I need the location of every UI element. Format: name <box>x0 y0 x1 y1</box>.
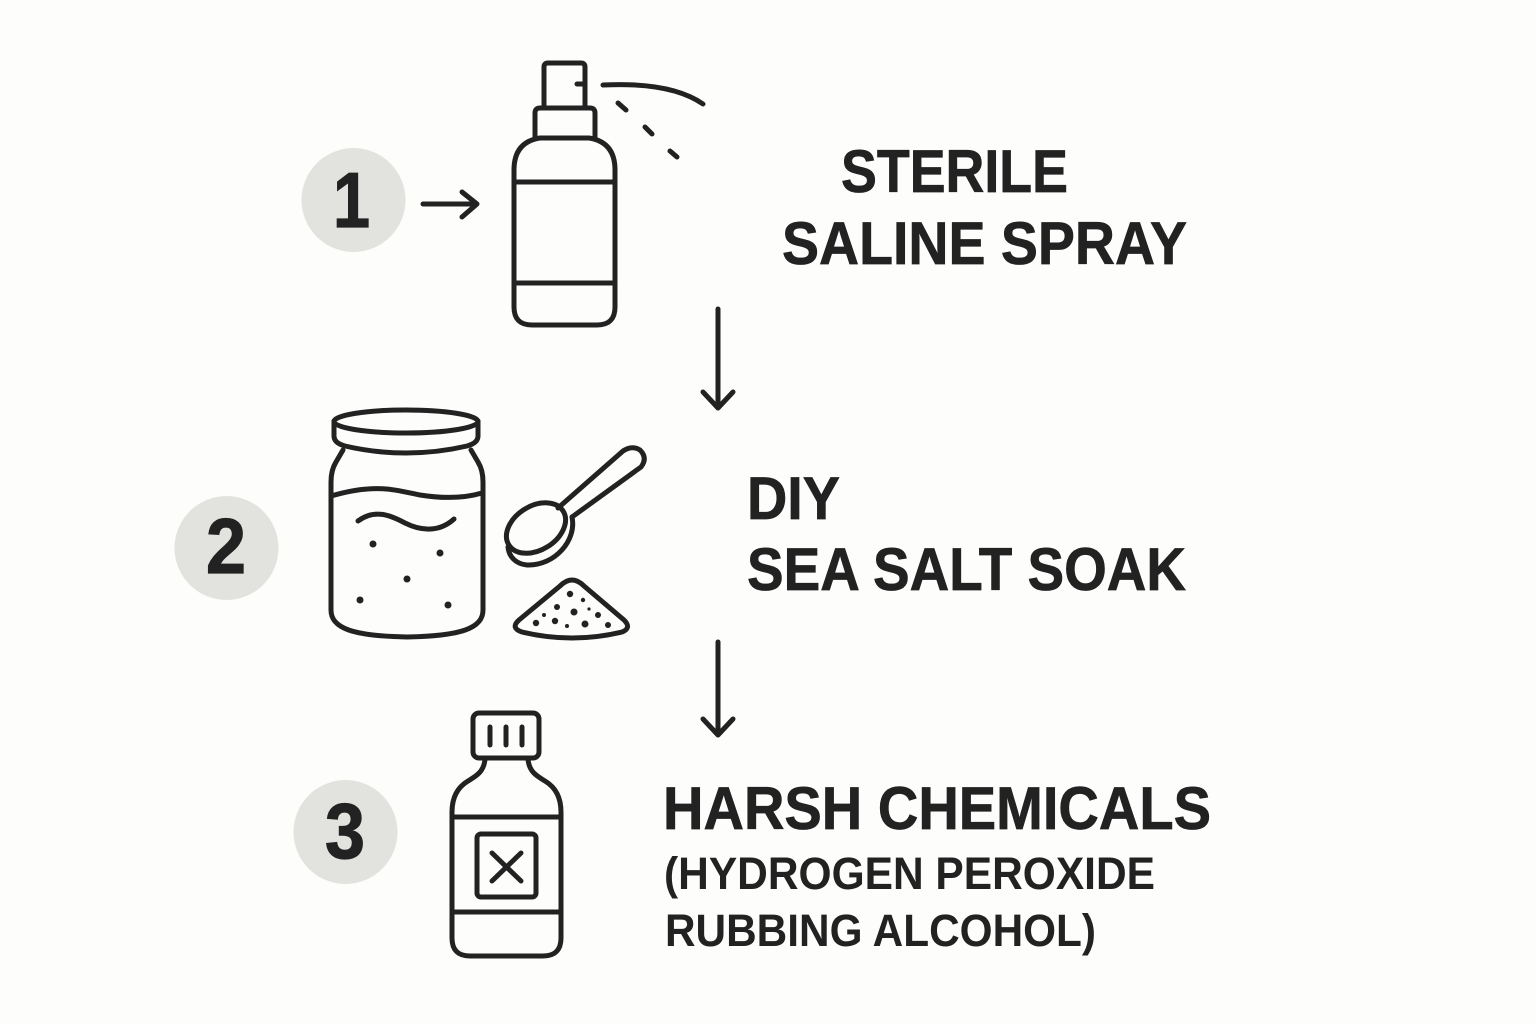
icon: jar of salt water <box>331 410 483 637</box>
heading: sterile saline spray: SALINE SPRAY <box>782 210 1187 277</box>
icon: measuring spoon <box>497 448 644 565</box>
text block: chemical examples: RUBBING ALCOHOL) <box>665 905 1096 956</box>
step 2 number badge: 2 <box>206 502 246 590</box>
heading: sterile saline spray <box>782 138 1187 277</box>
icon: saline spray bottle <box>514 63 703 325</box>
step 2 number badge <box>174 496 278 600</box>
arrow: badge 1 to spray bottle <box>423 192 477 217</box>
heading: sterile saline spray: STERILE <box>841 138 1068 205</box>
icon: chemical bottle with X label <box>452 713 561 956</box>
heading: DIY sea salt soak: SEA SALT SOAK <box>747 536 1186 603</box>
text block: chemical examples: (HYDROGEN PEROXIDE <box>664 848 1155 899</box>
heading: DIY sea salt soak <box>747 465 1186 603</box>
step 3 number badge: 3 <box>325 787 365 875</box>
icon: pile of sea salt <box>515 580 628 638</box>
text block: chemical examples <box>664 848 1155 956</box>
heading: DIY sea salt soak: DIY <box>747 465 840 532</box>
step 1 number badge: 1 <box>333 156 370 244</box>
heading: harsh chemicals: HARSH CHEMICALS <box>663 775 1211 842</box>
arrow: step 1 to step 2 <box>703 309 733 408</box>
step 1 number badge <box>302 148 406 252</box>
step 3 number badge <box>294 780 398 884</box>
arrow: step 2 to step 3 <box>703 642 733 735</box>
